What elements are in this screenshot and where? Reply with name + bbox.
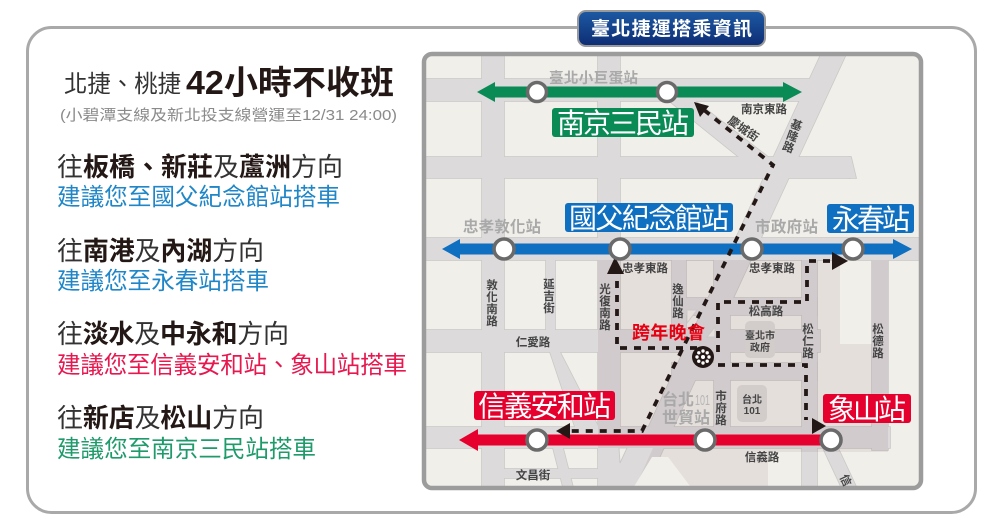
road labels: 德: [872, 334, 884, 348]
road labels: 復: [599, 294, 611, 308]
station names: grey transfer stations: 台北: [662, 390, 694, 409]
direction block: Nangang, Neihu: 往南港及內湖方向: [57, 236, 264, 266]
road labels: 松: [872, 322, 884, 336]
road labels: 化: [486, 290, 498, 304]
road labels: 仁愛路: [516, 335, 551, 349]
road labels: 仙: [672, 294, 684, 308]
map panel: [420, 50, 930, 495]
label: Xiangshan station: 象山站: [828, 394, 906, 425]
road labels: 忠孝東路: [622, 261, 668, 275]
direction block: Nangang, Neihu: [57, 236, 269, 295]
road labels: 南京東路: [741, 102, 787, 116]
label: Yongchun station: 永春站: [832, 204, 910, 235]
road labels: 吉: [543, 289, 555, 303]
heading: 42-hour service: 42小時不收班: [186, 64, 394, 101]
heading: 42-hour service: [64, 64, 394, 101]
direction block: Tamsui, Zhongyonghe: 建議您至信義安和站、象山站搭車: [57, 352, 407, 379]
label: Xinyi Anhe station: 信義安和站: [478, 391, 611, 422]
icon: event marker: [692, 346, 714, 368]
label: New Year's Eve party: 跨年晚會: [632, 322, 705, 343]
road labels: 敦: [486, 278, 498, 292]
road labels: 慶城街: [725, 113, 762, 145]
road labels: 府: [715, 401, 727, 415]
direction block: Xindian, Songshan: 往新店及松山方向: [57, 403, 264, 433]
station names: grey transfer stations: 忠孝敦化站: [463, 217, 541, 236]
map base with roads and district: [420, 50, 930, 495]
direction block: Xindian, Songshan: [57, 403, 316, 463]
building: Taipei City Hall: 臺北市: [745, 329, 775, 342]
building: Taipei 101: 101: [744, 406, 761, 417]
road labels: 逸: [672, 282, 684, 296]
building: Taipei City Hall: [745, 321, 775, 358]
road labels: 路: [599, 318, 611, 332]
building: Taipei 101: [737, 385, 767, 422]
direction block: Banqiao, Xinzhuang, Luzhou: [57, 152, 343, 211]
direction block: Banqiao, Xinzhuang, Luzhou: 建議您至國父紀念館站搭車: [57, 184, 340, 211]
road labels: 路: [872, 346, 884, 360]
road labels: 路: [672, 306, 684, 320]
road labels: 路: [715, 413, 727, 427]
road labels: 文昌街: [516, 468, 551, 482]
direction block: Tamsui, Zhongyonghe: 往淡水及中永和方向: [57, 319, 289, 349]
route: to Yongchun: [718, 252, 848, 352]
road labels: 路: [802, 346, 814, 360]
road labels: 忠孝東路: [749, 261, 795, 275]
road labels: 光: [599, 282, 611, 296]
direction block: Banqiao, Xinzhuang, Luzhou: 往板橋、新莊及蘆洲方向: [57, 152, 343, 182]
route: to Xiangshan: [718, 365, 826, 434]
road labels: 路: [781, 139, 797, 156]
building: Taipei 101: 台北: [742, 393, 762, 406]
road labels: 松高路: [749, 304, 784, 318]
direction block: Xindian, Songshan: 建議您至南京三民站搭車: [57, 436, 316, 463]
road labels: 信義路: [745, 450, 780, 464]
road labels: 仁: [802, 334, 814, 348]
station names: grey transfer stations: 市政府站: [755, 217, 818, 236]
title badge: 臺北捷運搭乘資訊: [578, 11, 765, 46]
road labels: 街: [543, 301, 555, 315]
title badge: 臺北捷運搭乘資訊: 臺北捷運搭乘資訊: [591, 18, 752, 40]
road labels: 基: [789, 117, 805, 134]
building: Taipei City Hall: 政府: [750, 341, 770, 354]
direction block: Nangang, Neihu: 建議您至永春站搭車: [57, 268, 269, 295]
station names: grey transfer stations: 世貿站: [662, 409, 710, 427]
road labels: 隆: [785, 128, 801, 145]
road labels: 松: [802, 322, 814, 336]
label: Nanjing Sanmin station: 南京三民站: [557, 108, 689, 139]
road labels: 路: [486, 314, 498, 328]
road labels: 南: [486, 303, 498, 316]
subheading: branch line note: (小碧潭支線及新北投支線營運至12/31 24:00): [60, 107, 397, 124]
road labels: 信: [837, 472, 855, 489]
direction block: Tamsui, Zhongyonghe: [57, 319, 407, 379]
station names: grey transfer stations: 臺北小巨蛋站: [549, 70, 638, 87]
route: to Nanjing Sanmin and Xinyi Anhe: [556, 102, 773, 439]
green line: Nanjing East Road: [477, 82, 802, 102]
road labels: 市: [715, 389, 727, 403]
stations: circles: [494, 82, 863, 450]
blue line: Zhongxiao East Road: [442, 239, 912, 259]
map frame: [424, 54, 921, 488]
label: Sun Yat-sen Memorial Hall station: 國父紀念館站: [569, 203, 729, 234]
station names: grey transfer stations: 101: [695, 392, 710, 409]
route: to Sun Yat-sen Memorial Hall: [607, 257, 697, 348]
heading: 42-hour service: 北捷、桃捷: [64, 71, 181, 98]
road labels: 延: [543, 278, 555, 291]
road labels: 南: [599, 307, 611, 320]
road labels: [486, 102, 884, 489]
red line: Xinyi Road: [459, 429, 827, 451]
station names: grey transfer stations: [463, 70, 818, 427]
